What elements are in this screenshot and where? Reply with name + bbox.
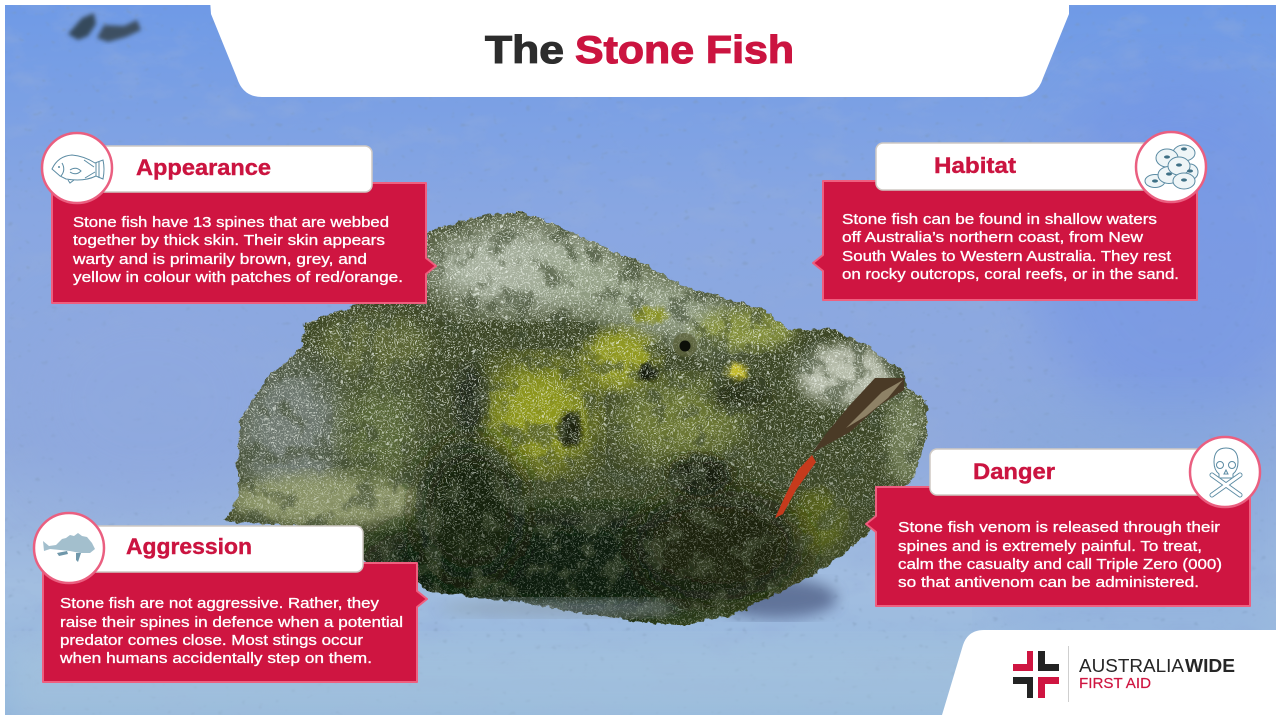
upper pale crust xyxy=(425,223,615,313)
heading bar xyxy=(876,143,1166,190)
callout body xyxy=(52,183,436,303)
heading: Danger xyxy=(973,459,1055,484)
eye xyxy=(673,333,697,357)
photo: stone fish xyxy=(224,210,928,626)
panel: habitat xyxy=(813,132,1206,300)
callout body xyxy=(813,181,1197,300)
body text: South Wales to Western Australia. They rest xyxy=(842,249,1171,265)
dark underside xyxy=(360,510,780,620)
heading: Habitat xyxy=(934,153,1017,178)
title text: The xyxy=(485,29,564,72)
heading bar xyxy=(90,146,372,192)
logo wordmark xyxy=(1079,656,1235,692)
shadow beneath fish xyxy=(713,578,837,618)
callout body xyxy=(43,563,427,682)
icon: first aid cross logo xyxy=(1013,651,1059,698)
heading: Appearance xyxy=(136,155,271,180)
body text: predator comes close. Most stings occur xyxy=(60,633,363,649)
panel: aggression xyxy=(34,513,427,682)
body text: warty and is primarily brown, grey, and xyxy=(72,252,367,268)
title text: Stone Fish xyxy=(575,29,794,72)
body text: so that antivenom can be administered. xyxy=(898,575,1199,591)
panel: appearance xyxy=(42,133,436,303)
body text: Stone fish are not aggressive. Rather, they xyxy=(60,596,380,612)
rock at top left xyxy=(68,13,141,42)
body text: on rocky outcrops, coral reefs, or in the sand. xyxy=(842,267,1179,283)
title text xyxy=(485,29,794,72)
panel: danger xyxy=(866,437,1260,606)
body text: off Australia’s northern coast, from New xyxy=(842,230,1144,246)
logo wordmark: FIRST AID xyxy=(1079,675,1151,692)
callout body xyxy=(866,487,1250,606)
grey tail mass xyxy=(235,360,345,500)
body text: when humans accidentally step on them. xyxy=(59,651,372,667)
heading bar xyxy=(80,526,363,572)
title panel xyxy=(210,0,1069,97)
icon: coral xyxy=(1136,132,1206,202)
logo wordmark: AUSTRALIA xyxy=(1079,656,1184,676)
heading bar xyxy=(930,449,1220,495)
body text xyxy=(72,215,403,286)
body text: together by thick skin. Their skin appears xyxy=(73,233,385,249)
panel: logo xyxy=(942,630,1276,715)
mouth xyxy=(775,378,904,518)
icon: stone fish xyxy=(34,513,104,583)
icon: fish xyxy=(42,133,112,203)
body text: Stone fish venom is released through their xyxy=(898,520,1220,536)
body text xyxy=(842,212,1179,283)
body text: Stone fish can be found in shallow waters xyxy=(842,212,1157,228)
body text: Stone fish have 13 spines that are webbed xyxy=(73,215,389,231)
body text: yellow in colour with patches of red/orange. xyxy=(73,270,403,286)
icon: skull and crossbones xyxy=(1190,437,1260,507)
body text: spines and is extremely painful. To treat, xyxy=(898,539,1202,555)
body text: calm the casualty and call Triple Zero (000) xyxy=(898,557,1222,573)
body text xyxy=(59,596,403,667)
sand plume at fish base xyxy=(440,599,680,617)
yellow patches xyxy=(485,360,595,470)
logo wordmark: WIDE xyxy=(1185,656,1235,676)
body text xyxy=(898,520,1222,591)
heading: Aggression xyxy=(126,534,252,559)
body text: raise their spines in defence when a potential xyxy=(60,615,403,631)
